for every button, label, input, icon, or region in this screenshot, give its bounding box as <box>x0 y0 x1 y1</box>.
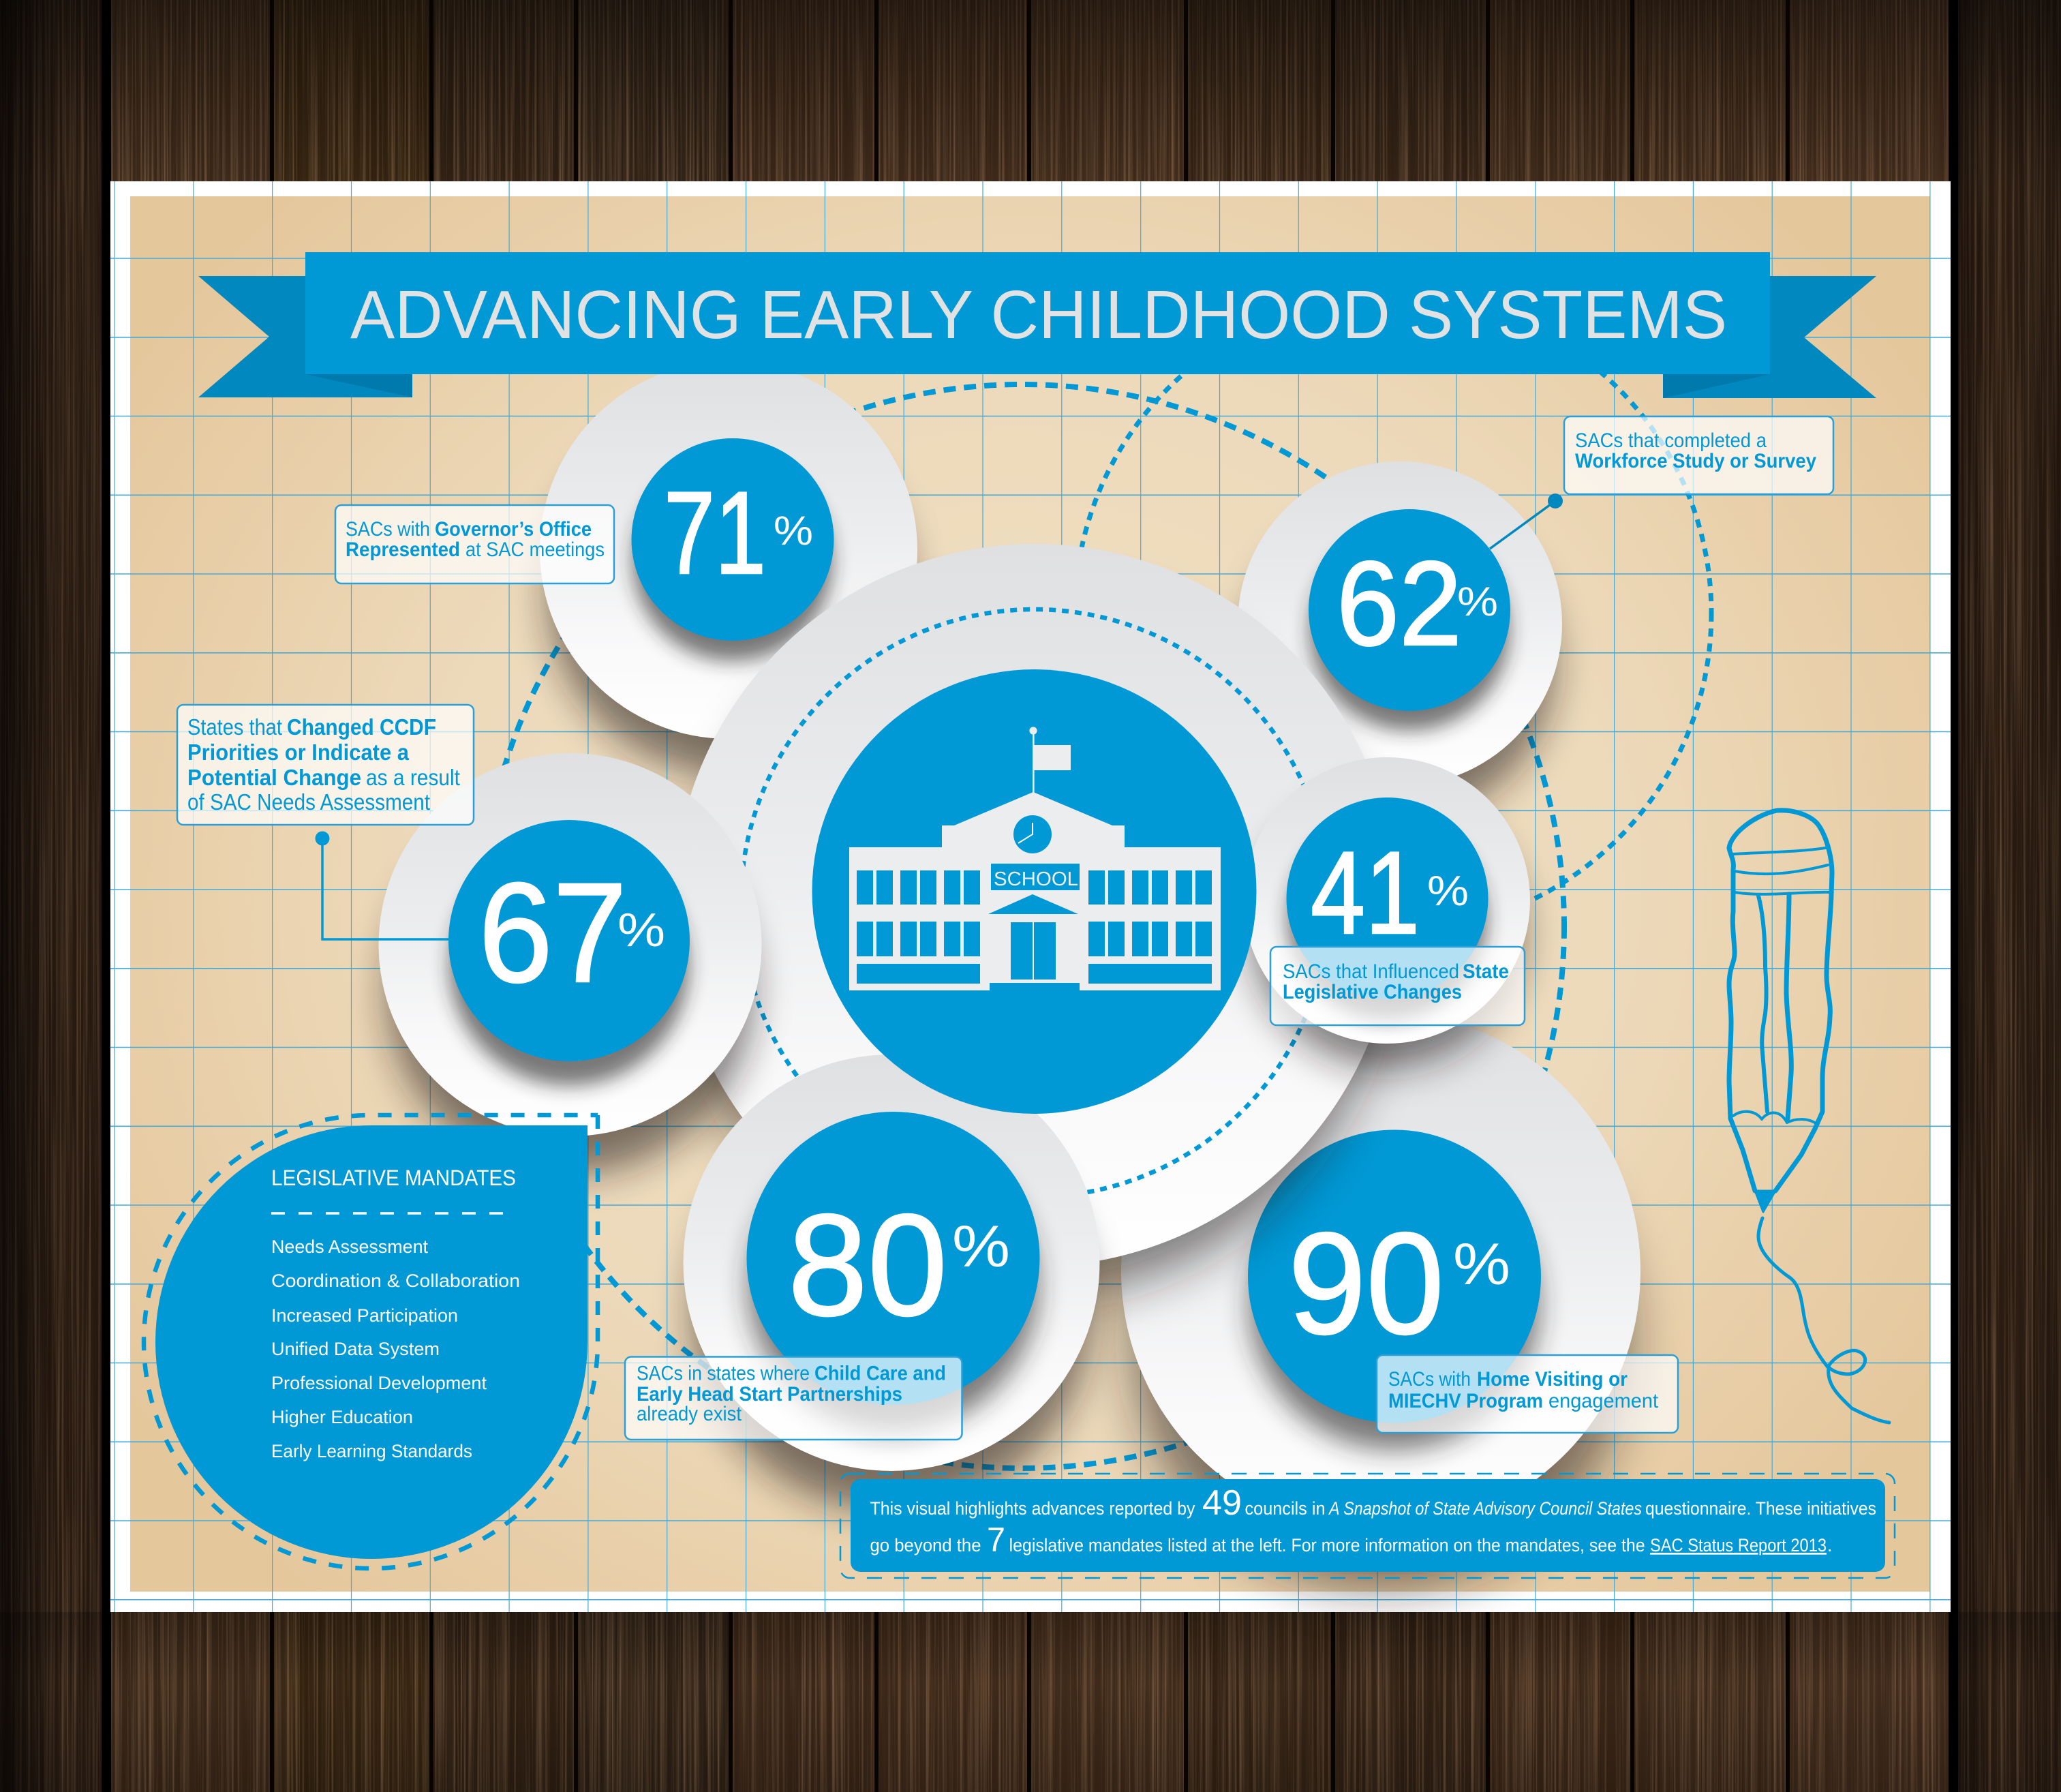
callout: child care partnerships: Child Care and <box>814 1362 946 1385</box>
leader line: 67 percent <box>315 832 448 939</box>
stat: 62%: 62 <box>1337 537 1462 671</box>
footer line 2: . <box>1827 1535 1833 1555</box>
callout: CCDF priorities: of SAC Needs Assessment <box>187 789 430 815</box>
callout: CCDF priorities: Changed CCDF <box>287 714 436 740</box>
footer line 1: councils in <box>1245 1498 1325 1519</box>
callout: home visiting: MIECHV Program <box>1388 1390 1543 1412</box>
callout: workforce study: Workforce Study or Survey <box>1575 450 1816 472</box>
heading: LEGISLATIVE MANDATES <box>271 1166 516 1190</box>
panel: 62 percent plate <box>1238 461 1562 819</box>
banner ribbon <box>198 252 1876 398</box>
callout: state legislative changes <box>1270 947 1525 1025</box>
callout: home visiting: Home Visiting or <box>1477 1368 1628 1391</box>
panel: central plate <box>673 544 1396 1295</box>
mandate list: Coordination & Collaboration <box>271 1271 520 1291</box>
stat: 80%: 80 <box>788 1184 947 1346</box>
callout: workforce study <box>1564 416 1833 494</box>
callout: governor's office: Represented <box>346 538 460 561</box>
callout: CCDF priorities <box>177 705 474 825</box>
stat: 80%: % <box>952 1214 1010 1279</box>
callout: CCDF priorities: as a result <box>366 765 460 790</box>
callout: state legislative changes: Legislative Changes <box>1283 981 1462 1003</box>
mandate list: Professional Development <box>271 1373 487 1393</box>
panel: legislative mandates <box>144 1115 598 1568</box>
leader line: 62 percent <box>1490 493 1563 549</box>
mandate list: Increased Participation <box>271 1305 458 1326</box>
paper sheet with grid <box>110 181 1951 1612</box>
callout: home visiting <box>1377 1355 1678 1433</box>
callout: child care partnerships <box>625 1356 962 1440</box>
callout: child care partnerships: already exist <box>637 1403 742 1425</box>
stat: 71%: 71 <box>664 468 766 598</box>
callout: state legislative changes: SACs that Influenced <box>1283 960 1459 983</box>
stat: 67%: 67 <box>478 854 627 1012</box>
callout: governor's office <box>335 505 614 583</box>
stat: 90%: 90 <box>1288 1202 1444 1364</box>
panel: 71 percent plate <box>540 361 917 774</box>
dashed connector circles <box>480 295 1711 1468</box>
footer line 1: A Snapshot of State Advisory Council States <box>1328 1498 1642 1519</box>
callout: child care partnerships: SACs in states where <box>637 1362 810 1385</box>
callout: CCDF priorities: Potential Change <box>187 765 361 790</box>
footer line 1: 49 <box>1202 1483 1242 1523</box>
callout: home visiting: SACs with <box>1388 1368 1471 1391</box>
panel: 90 percent plate <box>1121 1012 1640 1588</box>
footer line 2: go beyond the <box>870 1535 981 1555</box>
stat: 41%: 41 <box>1311 827 1420 958</box>
inner dashed ring <box>741 609 1328 1197</box>
icon: school building <box>849 727 1221 990</box>
callout: state legislative changes: State <box>1463 960 1509 983</box>
stat: 67%: % <box>617 903 665 956</box>
mandate list: Higher Education <box>271 1407 413 1427</box>
callout: governor's office: SACs with <box>346 518 430 541</box>
callout: home visiting: engagement <box>1548 1390 1659 1412</box>
footer line 2: SAC Status Report 2013 <box>1650 1535 1827 1555</box>
panel: 80 percent plate <box>683 1054 1100 1511</box>
panel: 67 percent plate <box>379 753 762 1174</box>
callout: governor's office: Governor’s Office <box>435 518 592 541</box>
mandate list <box>271 1236 520 1461</box>
footer line 1: This visual highlights advances reported by <box>870 1498 1195 1519</box>
icon: pencil sketch <box>1729 810 1889 1423</box>
panel: school circle <box>812 669 1257 1114</box>
title: ADVANCING EARLY CHILDHOOD SYSTEMS <box>350 277 1727 353</box>
panel: footer note <box>840 1474 1895 1578</box>
callout: CCDF priorities: Priorities or Indicate a <box>187 740 410 765</box>
panel: 41 percent plate <box>1244 757 1530 1067</box>
callout: CCDF priorities: States that <box>187 714 282 740</box>
footer line 2: legislative mandates listed at the left. For more information on the mandates, see the <box>1009 1535 1645 1555</box>
callout: child care partnerships: Early Head Start Partnerships <box>637 1383 902 1406</box>
stat: 62%: % <box>1457 579 1498 624</box>
callout: workforce study: SACs that completed a <box>1575 429 1767 452</box>
callout: governor's office: at SAC meetings <box>465 538 605 561</box>
footer line 1: questionnaire. These initiatives <box>1645 1498 1876 1519</box>
icon: school building: SCHOOL <box>994 868 1078 890</box>
mandate list: Early Learning Standards <box>271 1441 472 1461</box>
mandate list: Needs Assessment <box>271 1236 428 1257</box>
stat: 71%: % <box>774 508 813 553</box>
stat: 41%: % <box>1427 868 1469 915</box>
mandate list: Unified Data System <box>271 1339 440 1359</box>
stat: 90%: % <box>1453 1232 1510 1297</box>
footer line 2: 7 <box>987 1521 1005 1559</box>
